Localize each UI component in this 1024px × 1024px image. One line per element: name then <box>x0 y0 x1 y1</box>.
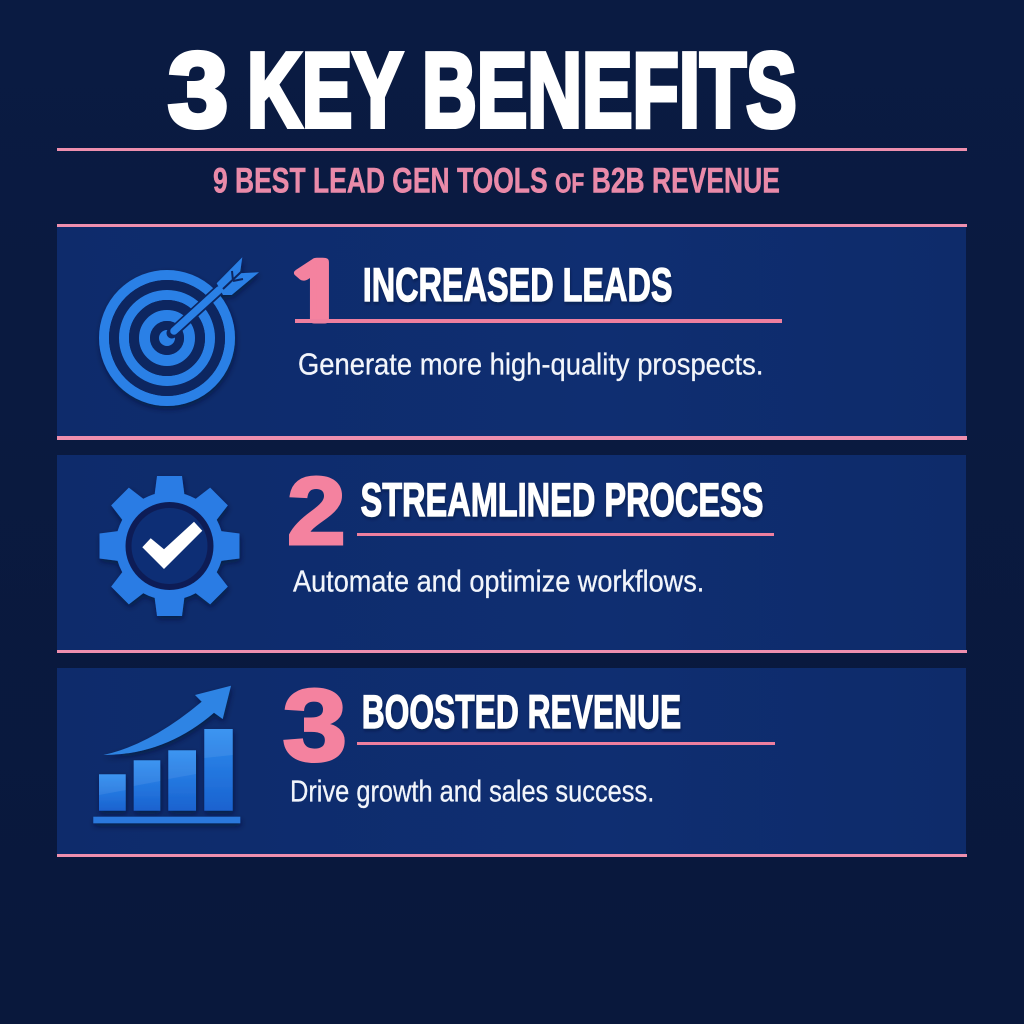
heading: boosted revenue: BOOSTED REVENUE <box>362 687 681 739</box>
title: 3 <box>168 30 228 149</box>
heading underline <box>357 533 774 536</box>
body text: Drive growth and sales success. <box>290 774 654 809</box>
title <box>168 30 797 150</box>
heading: streamlined process: STREAMLINED PROCESS <box>360 473 763 526</box>
panel: streamlined process <box>57 455 967 653</box>
icon: rising bar chart <box>93 686 240 823</box>
subtitle: 9 BEST LEAD GEN TOOLS OF B2B REVENUE <box>213 161 780 200</box>
panel: boosted revenue <box>57 668 967 857</box>
body text: Generate more high-quality prospects. <box>298 348 763 382</box>
number 3: 3 <box>282 669 347 783</box>
heading: increased leads: INCREASED LEADS <box>363 258 672 311</box>
icon: gear with check <box>100 476 240 616</box>
title: KEY <box>247 31 403 149</box>
title rule <box>57 148 967 151</box>
panel: increased leads <box>57 224 967 440</box>
number 2: 2 <box>287 458 346 565</box>
heading underline <box>295 319 782 323</box>
heading underline <box>357 742 775 745</box>
body text: Automate and optimize workflows. <box>293 565 704 599</box>
icon: target with arrow <box>104 257 259 401</box>
number 1: 1 <box>283 254 351 333</box>
title: BENEFITS <box>422 31 797 150</box>
